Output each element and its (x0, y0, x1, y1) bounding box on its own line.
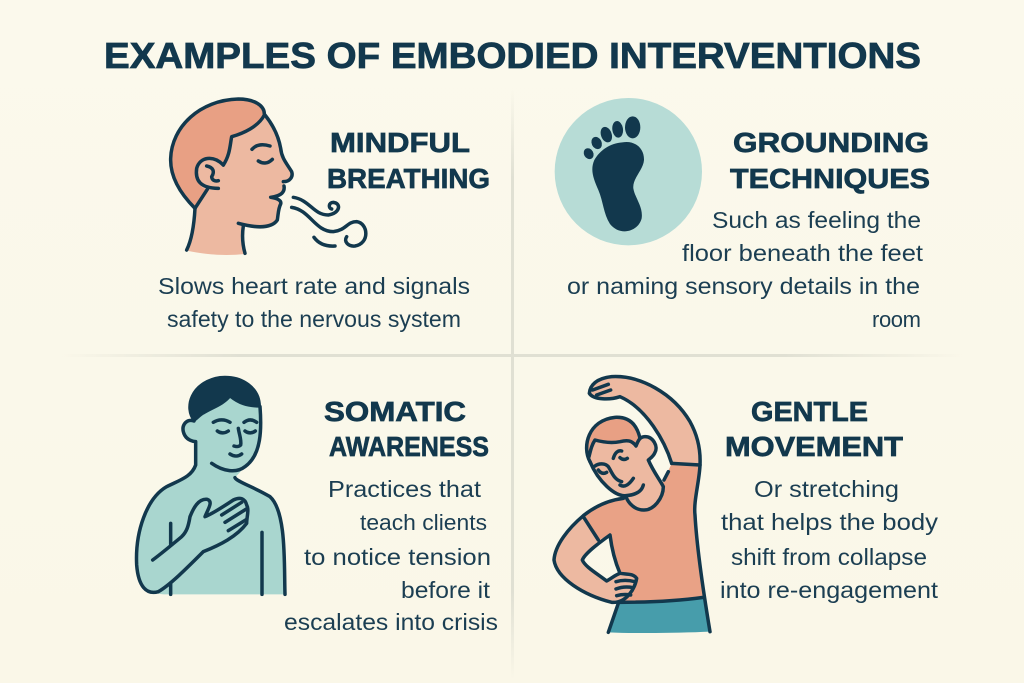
panel: grounding techniques (555, 98, 930, 332)
panel: somatic awareness (137, 377, 498, 635)
text block: floor beneath the feet (682, 240, 924, 266)
heading: TECHNIQUES (730, 163, 930, 194)
text block: shift from collapse (731, 544, 927, 570)
text block: Or stretching (754, 476, 899, 502)
panel: mindful breathing (158, 99, 490, 332)
heading: SOMATIC (324, 396, 466, 427)
text block: Practices that (328, 476, 482, 502)
text block: escalates into crisis (284, 609, 498, 635)
text block: teach clients (360, 510, 487, 535)
text block: Such as feeling the (712, 207, 921, 233)
text block: safety to the nervous system (167, 306, 461, 332)
text block: into re-engagement (720, 577, 939, 603)
text block (720, 476, 939, 603)
heading: GENTLE (751, 396, 868, 427)
text block (567, 207, 924, 332)
text block: to notice tension (304, 544, 491, 570)
text block: Slows heart rate and signals (158, 273, 470, 299)
text block (284, 476, 498, 635)
icon: footprint in circle (555, 98, 702, 245)
text block: room (872, 307, 921, 332)
icon: person stretching to the side (554, 377, 710, 633)
heading (730, 127, 930, 194)
text block (158, 273, 470, 332)
heading (324, 396, 489, 462)
icon: person with hand on chest (137, 377, 285, 594)
heading: AWARENESS (329, 431, 489, 462)
text block: or naming sensory details in the (567, 273, 920, 299)
heading: BREATHING (327, 163, 490, 194)
heading: MOVEMENT (725, 431, 903, 462)
text block: that helps the body (721, 509, 939, 535)
panel: gentle movement (554, 377, 939, 633)
heading: GROUNDING (733, 127, 929, 158)
text block: before it (401, 577, 491, 603)
heading (327, 127, 490, 194)
heading (725, 396, 903, 462)
title: EXAMPLES OF EMBODIED INTERVENTIONS (104, 35, 921, 76)
icon: head breathing out (171, 99, 366, 255)
heading: MINDFUL (330, 127, 470, 158)
